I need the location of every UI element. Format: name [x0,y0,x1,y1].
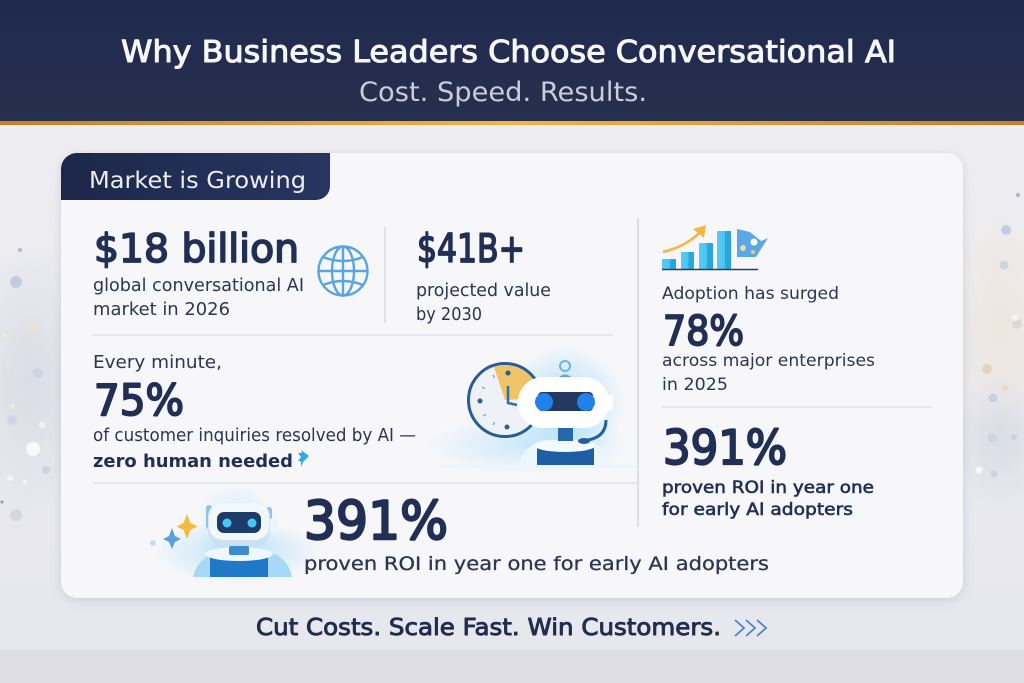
header banner [0,0,1024,125]
stat: 78 percent adoption [662,284,875,395]
stat: 75 percent: of customer inquiries resolved by AI — [93,425,416,446]
right sparkle glow [945,193,1024,510]
stat: 41B [416,227,551,325]
robot [518,361,613,465]
stat: 18 billion: $18 billion [94,227,299,272]
stat: 391 percent side: 391% [663,421,787,476]
title: Why Business Leaders Choose Conversational AI [121,35,896,70]
stat: 41B: projected value [416,280,551,301]
bottom band [0,650,1024,683]
stat: 41B: by 2030 [416,304,482,325]
robot body [193,502,292,577]
icon: small arrow [298,450,309,467]
stat: 75 percent [93,352,416,472]
stat: 78 percent adoption: 78% [663,307,744,355]
icon: triple chevrons [735,620,766,636]
stat: 391 percent main: 391% [304,491,448,552]
stat: 18 billion: market in 2026 [93,299,230,320]
icon: rising bar chart [662,225,768,270]
panel tab heading: Market is Growing [89,168,306,194]
panel tab heading [61,153,330,200]
sparkle: blue [163,528,181,549]
clock [468,364,542,436]
stat: 391 percent side: proven ROI in year one [662,478,874,498]
stat: 75 percent: Every minute, [93,352,222,373]
stat: 75 percent: 75% [94,376,184,426]
stat: 41B: $41B+ [417,227,525,272]
left sparkle glow [0,240,95,521]
stat: 391 percent main: proven ROI in year one for early AI adopters [304,553,769,575]
stat: 391 percent side [662,421,874,520]
stat: 78 percent adoption: across major enterprises [662,351,875,371]
sparkle: gold [176,514,198,539]
stat: 75 percent: zero human needed [93,451,293,472]
icon: globe [318,246,368,296]
stat: 18 billion: global conversational AI [93,275,304,296]
stat: 18 billion [93,227,304,320]
stat: 78 percent adoption: in 2025 [662,375,728,395]
footer tagline: Cut Costs. Scale Fast. Win Customers. [256,615,721,641]
subtitle: Cost. Speed. Results. [359,77,647,108]
stat: 78 percent adoption: Adoption has surged [662,284,839,304]
stat: 391 percent side: for early AI adopters [662,500,853,520]
stat: 391 percent main [304,491,769,575]
illustration: clock and support robot [425,345,637,475]
illustration: robot with sparkles [150,483,323,584]
panel: market is growing [61,153,963,598]
